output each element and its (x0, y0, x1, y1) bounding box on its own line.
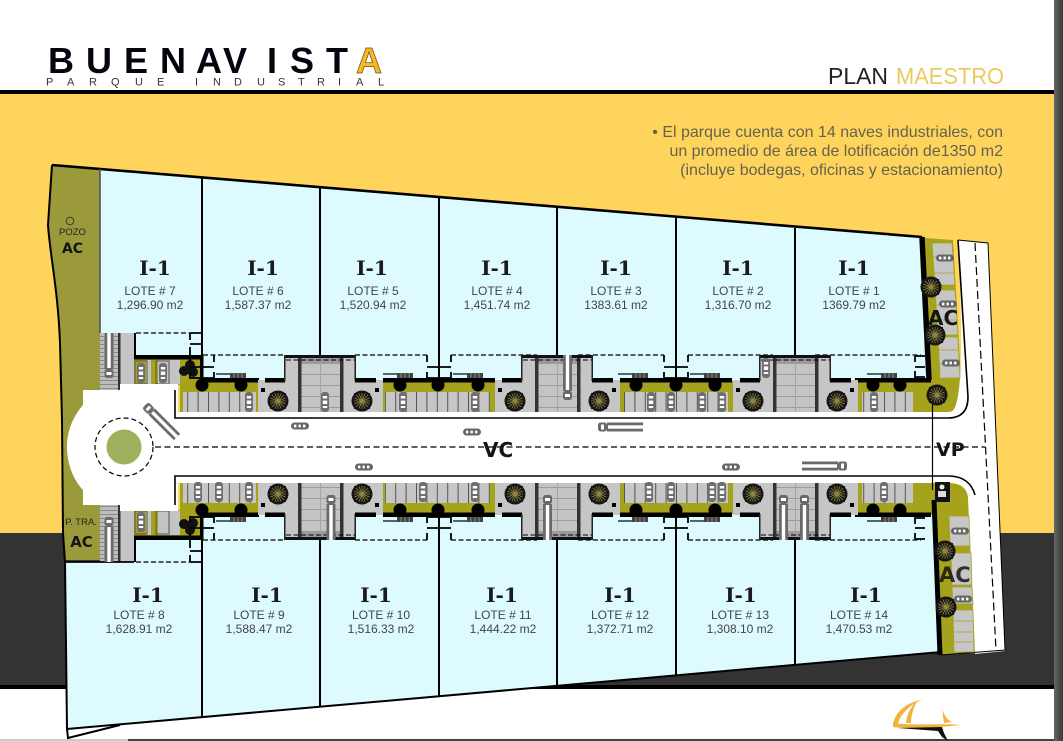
lot labels: top row: I-1 (481, 256, 513, 280)
title: Buenavista logo: BUENAVIST (48, 40, 348, 81)
lot labels: bottom row: LOTE # 9 (233, 608, 285, 622)
road labels: AC (928, 306, 958, 330)
lot labels: top row: LOTE # 3 (590, 284, 642, 298)
parking bottom right (949, 516, 974, 652)
lot labels: bottom row: 1,470.53 m2 (826, 622, 893, 636)
lot labels: bottom row: I-1 (486, 583, 518, 607)
lot labels: bottom row: 1,444.22 m2 (470, 622, 537, 636)
parking top right (932, 243, 960, 378)
road labels: VP (936, 439, 965, 461)
lot labels: bottom row: LOTE # 12 (591, 608, 649, 622)
lot labels: bottom row: I-1 (604, 583, 636, 607)
lot labels: bottom row: I-1 (251, 583, 283, 607)
text block: park description: un promedio de área de lotificación de1350 m2 (669, 143, 1003, 160)
labels: left green area (59, 217, 97, 551)
panel: lower building strip (100, 483, 931, 562)
icon: sailboat logo (893, 700, 961, 741)
lot labels: bottom row: LOTE # 14 (830, 608, 888, 622)
panel: upper lots (100, 169, 930, 385)
text block: park description: (incluye bodegas, oficinas y estacionamiento) (680, 162, 1003, 179)
labels: left green area: POZO (59, 227, 86, 238)
lot labels: bottom row: I-1 (725, 583, 757, 607)
panel: upper building strip (100, 333, 931, 412)
text block: park description: • El parque cuenta con 14 naves industriales, con (652, 124, 1003, 141)
lot labels: bottom row: 1,308.10 m2 (707, 622, 774, 636)
panel: right green area bottom (900, 483, 975, 655)
road network (67, 240, 1005, 654)
lot labels: bottom row: LOTE # 8 (113, 608, 165, 622)
lot labels: top row (117, 256, 886, 312)
lot labels: top row: LOTE # 2 (712, 284, 764, 298)
panel: right green area top (900, 238, 962, 412)
lot labels: top row: LOTE # 1 (828, 284, 880, 298)
road labels: VC (483, 438, 513, 462)
lot labels: top row: I-1 (722, 256, 754, 280)
lot labels: top row: I-1 (600, 256, 632, 280)
lot labels: top row: I-1 (247, 256, 279, 280)
lot labels: top row: 1,296.90 m2 (117, 298, 184, 312)
lot labels: top row: I-1 (139, 256, 171, 280)
lot labels: bottom row: I-1 (360, 583, 392, 607)
lot labels: top row: LOTE # 4 (471, 284, 523, 298)
labels: left green area: AC (62, 241, 83, 257)
lot labels: top row: LOTE # 5 (347, 284, 399, 298)
roundabout island (95, 418, 153, 476)
labels: left green area: P. TRA. (65, 517, 97, 528)
lot labels: bottom row: I-1 (850, 583, 882, 607)
site plan (48, 165, 1005, 738)
lot labels: top row: 1,316.70 m2 (705, 298, 772, 312)
lot labels: bottom row: 1,628.91 m2 (106, 622, 173, 636)
lot labels: top row: LOTE # 6 (232, 284, 284, 298)
lot dividers and site outline (48, 165, 1005, 738)
lot labels: top row: 1,520.94 m2 (340, 298, 407, 312)
lot labels: bottom row: LOTE # 10 (352, 608, 410, 622)
heading: Plan Maestro: PLAN (828, 63, 888, 89)
road labels: AC (939, 563, 971, 587)
lot labels: bottom row (106, 583, 893, 636)
icon: person at gate (935, 482, 950, 502)
road labels (483, 306, 971, 587)
lot labels: top row: 1369.79 m2 (822, 298, 886, 312)
lot labels: bottom row: 1,516.33 m2 (348, 622, 415, 636)
vehicles (104, 254, 972, 602)
heading: Plan Maestro (828, 63, 1004, 89)
panel: lower lots (65, 510, 941, 729)
lot labels: top row: I-1 (356, 256, 388, 280)
lot labels: bottom row: LOTE # 11 (474, 608, 532, 622)
labels: left green area: AC (70, 533, 93, 551)
title: Buenavista logo: A (356, 40, 382, 81)
lot labels: top row: 1,451.74 m2 (464, 298, 531, 312)
lot labels: bottom row: I-1 (132, 583, 164, 607)
lot labels: top row: 1383.61 m2 (584, 298, 648, 312)
lot labels: bottom row: LOTE # 13 (711, 608, 769, 622)
trees (920, 276, 956, 618)
lot labels: top row: LOTE # 7 (124, 284, 176, 298)
lot labels: top row: I-1 (838, 256, 870, 280)
panel: left green area (48, 165, 100, 560)
lot labels: bottom row: 1,588.47 m2 (226, 622, 293, 636)
lot labels: bottom row: 1,372.71 m2 (587, 622, 654, 636)
heading: Plan Maestro: MAESTRO (896, 63, 1004, 89)
title: Buenavista logo: PARQUEINDUSTRIAL (46, 76, 384, 88)
text block: park description (652, 124, 1003, 179)
lot labels: top row: 1,587.37 m2 (225, 298, 292, 312)
